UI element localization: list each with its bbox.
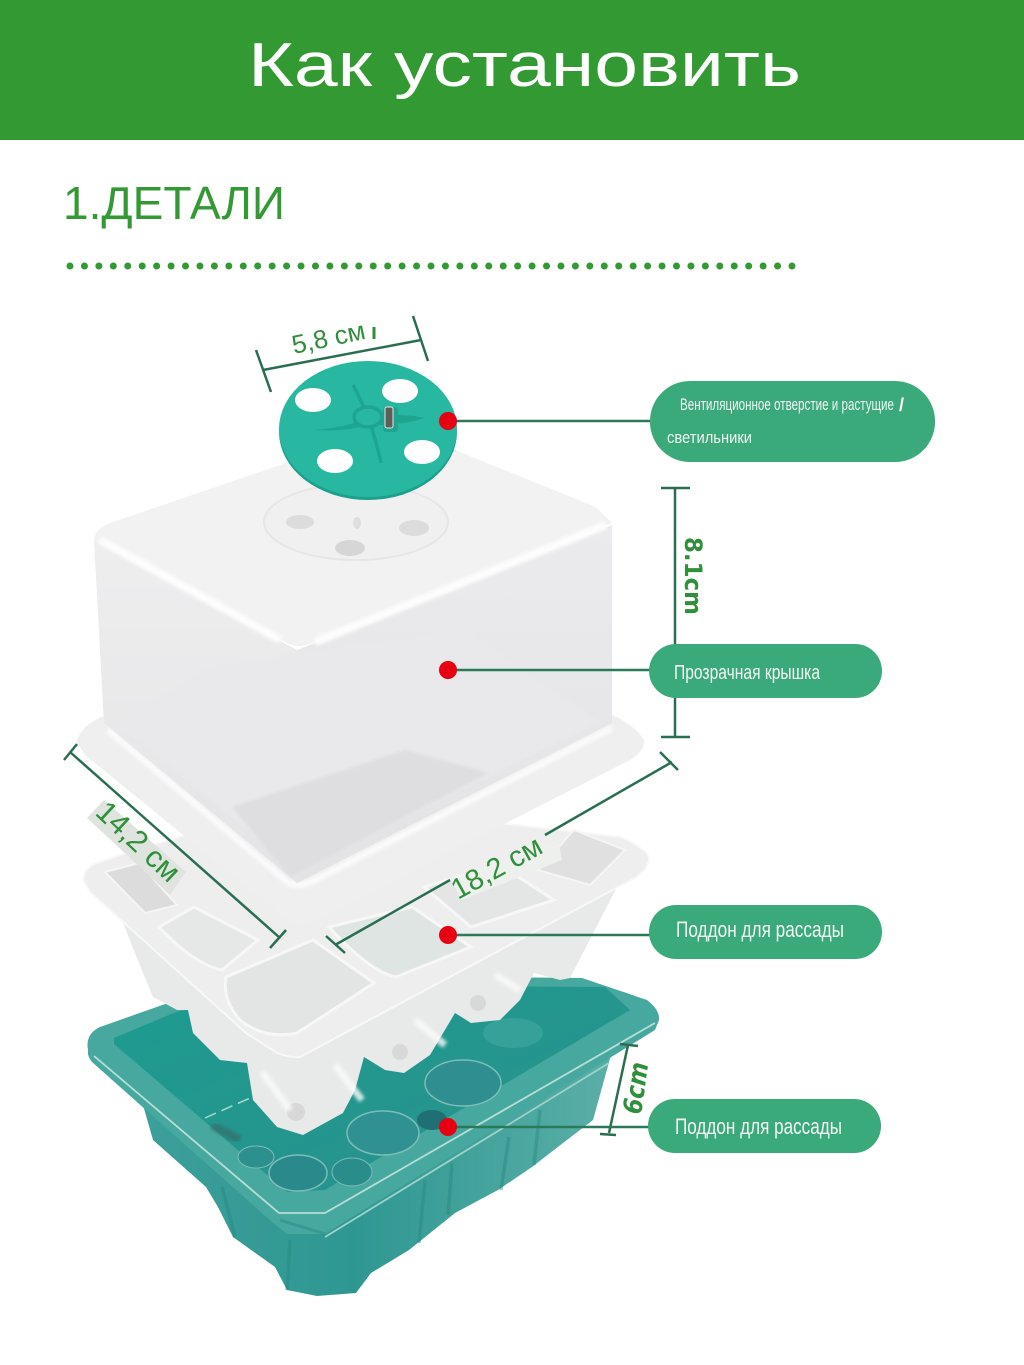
tray wall ribs	[222, 1110, 540, 1290]
tray cups	[347, 1111, 419, 1155]
callout: lid	[439, 644, 882, 698]
dimension: 8.1cm: 8.1cm	[679, 537, 707, 615]
hanging cells	[123, 850, 617, 1135]
lid flange	[77, 715, 644, 923]
tray rim highlight	[94, 1023, 655, 1213]
tray rim	[88, 975, 659, 1234]
callout: base tray: Поддон для рассады	[675, 1114, 842, 1139]
callout: base tray	[439, 1099, 881, 1153]
soft front corner	[287, 650, 307, 860]
dimension: 18,2 см: 18,2 см	[446, 830, 548, 906]
callout: seedling tray: Поддон для рассады	[676, 917, 844, 942]
disk cross	[312, 415, 425, 430]
seedling cell tray	[83, 800, 649, 1135]
callout: vent: /	[899, 395, 904, 415]
title: Как установить	[248, 31, 801, 100]
dimension: 6cm	[600, 1044, 655, 1135]
callout: vent: Вентиляционное отверстие и растущие	[680, 395, 894, 414]
cell base details	[287, 1103, 305, 1121]
callout: seedling tray	[439, 905, 882, 959]
inner reflection	[232, 750, 489, 877]
tray body	[143, 1055, 611, 1296]
front cell openings	[225, 940, 374, 1035]
dimension: 14,2 см	[64, 744, 286, 948]
lid left wall	[94, 540, 297, 883]
lid recess	[264, 484, 448, 560]
callout: vent	[439, 381, 935, 462]
header banner	[0, 0, 1024, 140]
lid highlights	[100, 525, 606, 642]
flange highlight	[108, 728, 612, 885]
transparent lid	[77, 430, 644, 923]
dimension: 18,2 см	[326, 752, 678, 953]
dimension: 8.1cm	[661, 488, 707, 737]
cell ribs	[262, 975, 520, 1110]
callout: vent: светильники	[667, 428, 752, 447]
callout: lid: Прозрачная крышка	[674, 662, 821, 684]
dotted divider	[70, 262, 792, 270]
dimension: 5,8 см	[256, 315, 428, 392]
usb plug	[383, 407, 398, 432]
vent holes	[295, 379, 440, 473]
section heading: 1.ДЕТАЛИ	[63, 177, 285, 229]
lid right wall	[297, 525, 612, 883]
tray flange	[83, 800, 649, 1057]
lid floor reflection	[120, 630, 600, 870]
teal base tray	[88, 975, 659, 1296]
dimension: 5,8 см: 5,8 см	[289, 315, 368, 360]
dimension: 6cm: 6cm	[618, 1060, 655, 1116]
tray interior	[114, 985, 630, 1192]
lid top	[94, 430, 612, 646]
dimension: 14,2 см: 14,2 см	[89, 795, 187, 889]
vent disk	[279, 361, 457, 500]
